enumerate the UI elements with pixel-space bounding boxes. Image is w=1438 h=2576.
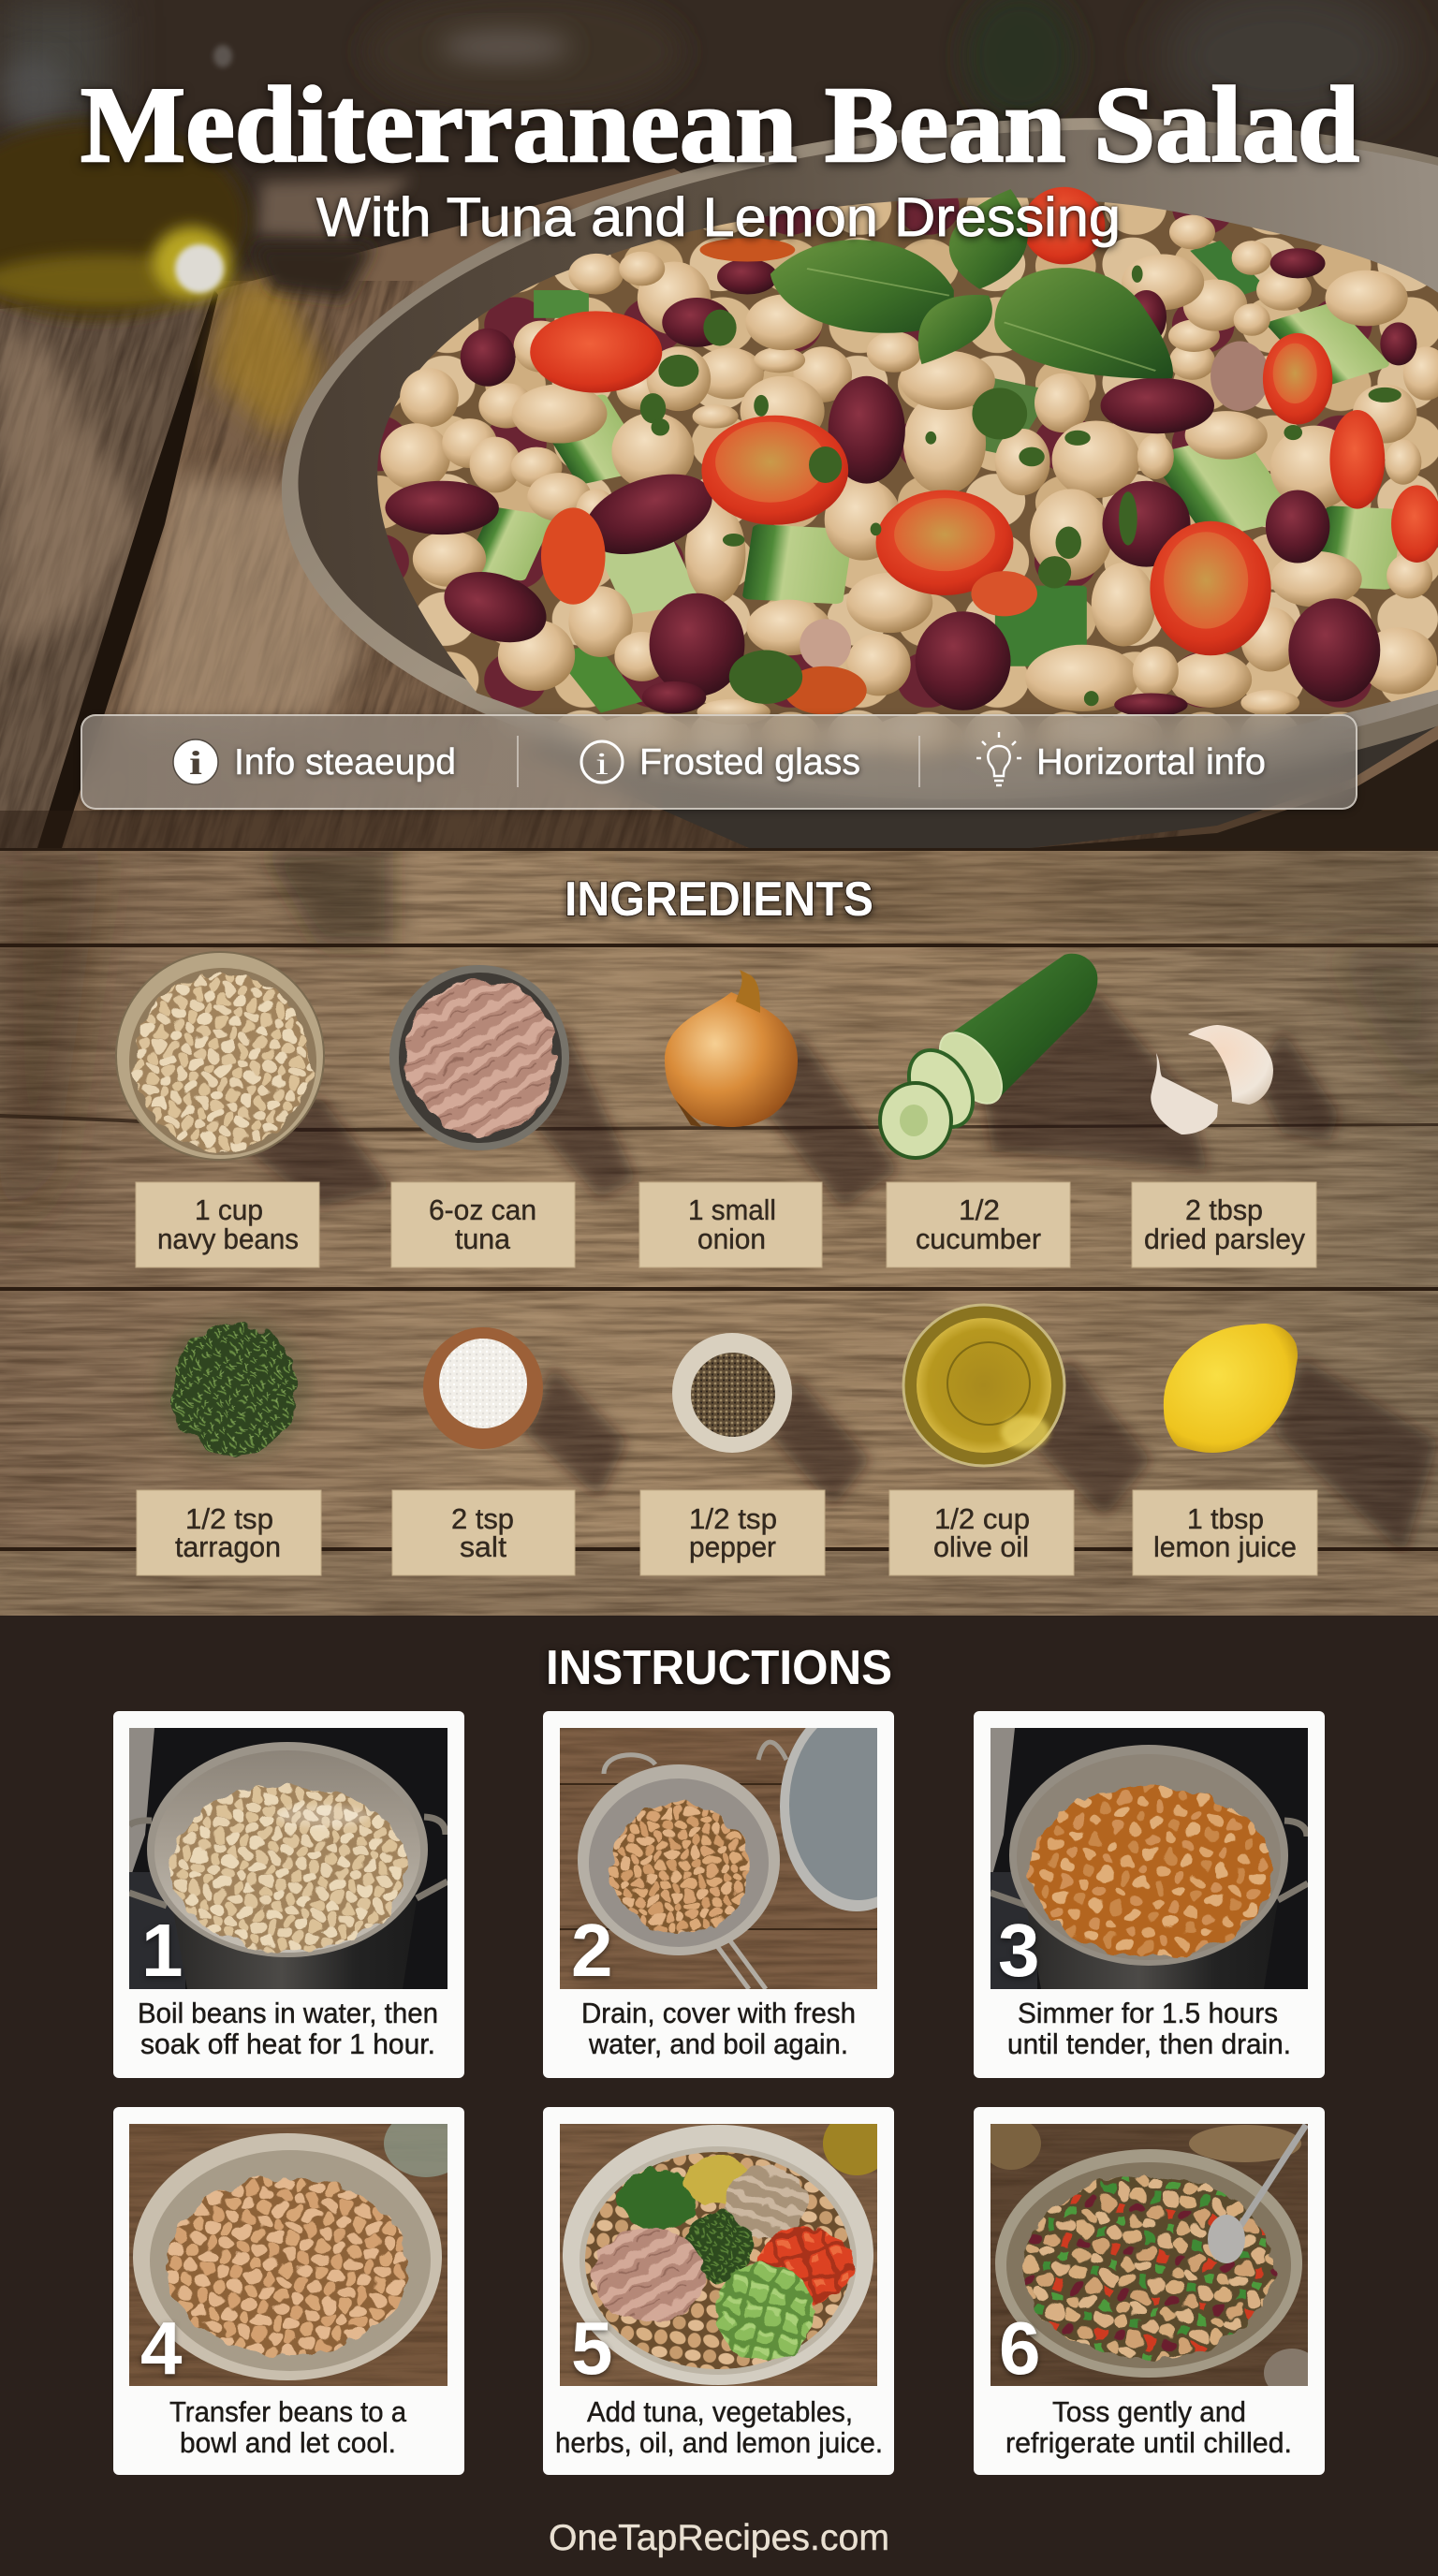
- icon: olive oil glass bowl: [903, 1305, 1064, 1466]
- cast shadows: [243, 992, 1438, 1554]
- step photo 4: beans cooling in bowl: [129, 2124, 448, 2386]
- step card 4: [113, 2107, 468, 2475]
- label: 1/2 cucumber: [887, 1182, 1070, 1267]
- label: 1 tbsp lemon juice: lemon juice: [1153, 1530, 1297, 1563]
- label: 1 tbsp lemon juice: 1 tbsp: [1187, 1502, 1264, 1535]
- label: 2 tbsp dried parsley: dried parsley: [1144, 1222, 1305, 1255]
- label: 1 cup navy beans: [136, 1182, 319, 1267]
- icon: filled info circle: i: [189, 744, 202, 782]
- blurred background objects: [0, 0, 1404, 131]
- wood plank background: [0, 848, 1438, 1616]
- step card 5: Add tuna, vegetables,: [587, 2395, 853, 2428]
- frosted glass info panel: [81, 714, 1357, 810]
- label: 1/2 tsp tarragon: 1/2 tsp: [185, 1502, 273, 1535]
- cucumber pieces: [462, 241, 1403, 712]
- step card 4: bowl and let cool.: [180, 2426, 396, 2459]
- label: 1 cup navy beans: 1 cup: [195, 1193, 263, 1226]
- heading: ingredients: INGREDIENTS: [565, 872, 873, 927]
- step card 6: refrigerate until chilled.: [1005, 2426, 1292, 2459]
- info item 2: Frosted glass: [639, 742, 860, 783]
- bowl: [264, 81, 1438, 848]
- label: 1 small onion: 1 small: [688, 1193, 776, 1226]
- label: 1/2 tsp pepper: [640, 1490, 825, 1575]
- parsley flecks: [640, 266, 1401, 706]
- info item 1: Info steaeupd: [234, 742, 456, 783]
- step card 4: Transfer beans to a: [169, 2395, 407, 2428]
- tomatoes: [530, 187, 1438, 714]
- step card 1: soak off heat for 1 hour.: [140, 2027, 435, 2060]
- step number 6: 6: [999, 2306, 1041, 2390]
- step card 6: Toss gently and: [1052, 2395, 1246, 2428]
- step number 4: 4: [140, 2306, 183, 2390]
- info item 3: [976, 732, 1266, 785]
- step card 5: herbs, oil, and lemon juice.: [555, 2426, 883, 2459]
- step number 2: 2: [571, 1909, 612, 1992]
- kidney beans: [385, 248, 1416, 717]
- label: 1/2 cup olive oil: [889, 1490, 1074, 1575]
- label: 2 tsp salt: salt: [460, 1530, 506, 1563]
- basil leaves: [770, 189, 1173, 378]
- icon: onion: [665, 970, 798, 1127]
- step photo 2: draining in colander: [560, 1728, 877, 1989]
- hero photo: salad bowl on wooden table: [0, 0, 1438, 848]
- label: 6-oz can tuna: [391, 1182, 575, 1267]
- white beans: [381, 215, 1438, 757]
- label: 1 small onion: onion: [697, 1222, 766, 1255]
- label: 1 cup navy beans: navy beans: [157, 1222, 299, 1255]
- subtitle: With Tuna and Lemon Dressing: [316, 187, 1121, 248]
- icon: outlined info circle: [581, 741, 623, 783]
- label: 1 small onion: [639, 1182, 822, 1267]
- heading: instructions: INSTRUCTIONS: [546, 1641, 892, 1695]
- icon: outlined info circle: i: [595, 747, 609, 782]
- footer: website: OneTapRecipes.com: [549, 2518, 889, 2558]
- icon: filled info circle: [173, 739, 218, 784]
- salad: [377, 187, 1438, 757]
- step card 3: [974, 1711, 1325, 2078]
- step number 5: 5: [571, 2306, 612, 2390]
- icon: light bulb: [976, 732, 1021, 785]
- label: 2 tbsp dried parsley: [1132, 1182, 1316, 1267]
- label: 1/2 tsp tarragon: tarragon: [175, 1530, 281, 1563]
- food base: [377, 198, 1438, 753]
- step card 6: [974, 2107, 1325, 2475]
- step photo 6: tossed salad with spoon: [981, 2117, 1320, 2397]
- label: 1/2 cup olive oil: 1/2 cup: [934, 1502, 1030, 1535]
- icon: lemon: [1164, 1324, 1298, 1453]
- wooden table background: [0, 0, 1438, 848]
- ingredients section on wood planks: [0, 851, 1438, 1616]
- step photo 5: ingredients added to bowl: [560, 2112, 890, 2386]
- label: 6-oz can tuna: 6-oz can: [429, 1193, 536, 1226]
- icon: pepper dish: [672, 1333, 792, 1453]
- step number 1: 1: [141, 1909, 183, 1992]
- title: Mediterranean Bean Salad: [81, 66, 1359, 185]
- label: 2 tbsp dried parsley: 2 tbsp: [1185, 1193, 1263, 1226]
- icon: salt bowl: [423, 1327, 543, 1449]
- step photo 1: boiling pot: [129, 1728, 448, 1989]
- icon: cucumber with slices: [880, 954, 1097, 1158]
- icon: bowl of navy beans: [116, 952, 324, 1160]
- step card 1: [113, 1711, 464, 2078]
- step card 3: until tender, then drain.: [1007, 2027, 1291, 2060]
- icon: tarragon pile: [157, 1316, 311, 1462]
- label: 2 tsp salt: 2 tsp: [451, 1502, 514, 1535]
- icon: garlic cloves: [1151, 1025, 1273, 1134]
- label: 1/2 tsp pepper: pepper: [689, 1530, 776, 1563]
- step card 2: Drain, cover with fresh: [581, 1997, 856, 2029]
- label: 2 tsp salt: [392, 1490, 575, 1575]
- bowl underside: [524, 562, 1438, 848]
- label: 1 tbsp lemon juice: [1133, 1490, 1317, 1575]
- label: 1/2 tsp pepper: 1/2 tsp: [689, 1502, 777, 1535]
- step card 2: water, and boil again.: [588, 2027, 848, 2060]
- label: 1/2 tsp tarragon: [137, 1490, 321, 1575]
- step photo 3: simmering pot: [990, 1728, 1308, 1989]
- step card 3: Simmer for 1.5 hours: [1018, 1997, 1278, 2029]
- olive oil glass: [0, 122, 248, 318]
- label: 1/2 cup olive oil: olive oil: [933, 1530, 1029, 1563]
- label: 1/2 cucumber: 1/2: [959, 1193, 1000, 1226]
- step card 1: Boil beans in water, then: [138, 1997, 438, 2029]
- label: 6-oz can tuna: tuna: [455, 1222, 511, 1255]
- icon: can of tuna: [389, 965, 569, 1150]
- step card 2: [543, 1711, 894, 2078]
- info item 3: Horizortal info: [1036, 742, 1266, 783]
- instructions section: [113, 1641, 1325, 2558]
- step number 3: 3: [998, 1909, 1039, 1992]
- step card 5: [543, 2107, 894, 2475]
- label: 1/2 cucumber: cucumber: [916, 1222, 1041, 1255]
